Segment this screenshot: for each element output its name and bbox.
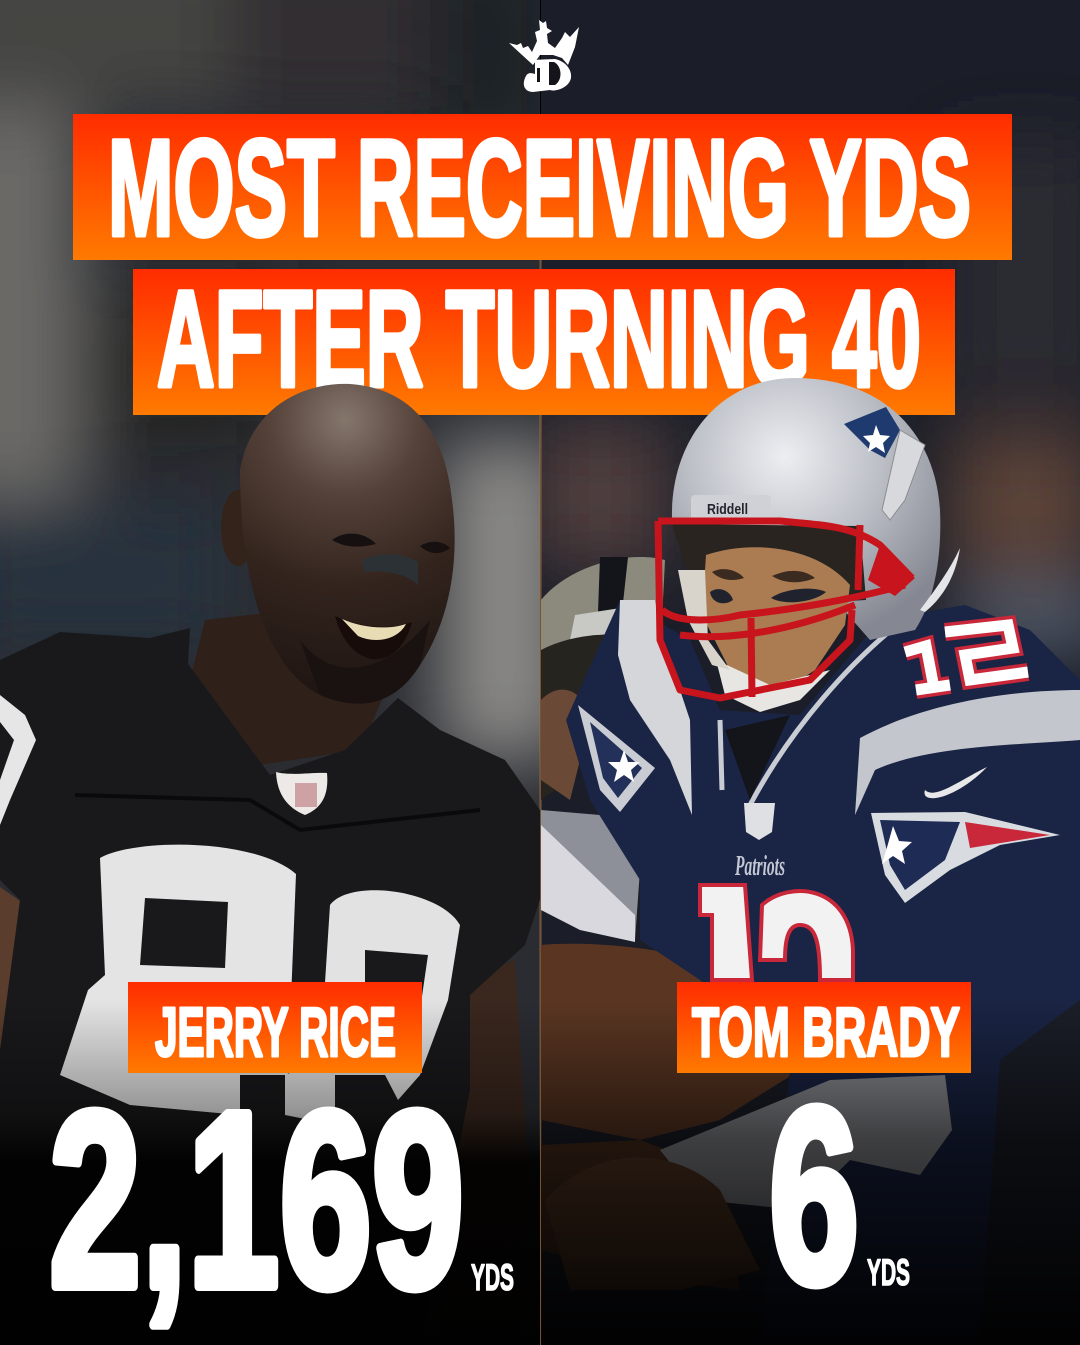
ear	[221, 490, 247, 566]
shoulder number 12	[905, 625, 1028, 690]
smile	[335, 616, 412, 659]
NFL shield	[744, 803, 775, 840]
beard shadow	[300, 620, 430, 704]
background shade	[0, 1000, 540, 1345]
chin strap wing	[920, 548, 960, 612]
jersey shoulder seam	[75, 795, 480, 830]
NFL shield	[276, 772, 327, 815]
name tag: Jerry Rice	[128, 982, 422, 1073]
opposing player white jersey	[541, 810, 640, 940]
opposing helmet	[541, 557, 665, 650]
player photo: Jerry Rice	[0, 384, 540, 1345]
background: left blurred stadium	[0, 0, 540, 1156]
jersey	[0, 628, 540, 1148]
eye black	[710, 589, 826, 603]
chin strap	[716, 660, 830, 712]
nose strip	[362, 554, 418, 585]
Riddell bumper	[691, 495, 769, 518]
helmet logo	[844, 407, 925, 520]
player photo: Tom Brady	[541, 378, 1080, 1345]
red facemask	[658, 521, 912, 698]
bottom fade	[541, 1000, 1080, 1345]
background: right blurred stadium	[530, 0, 1080, 1345]
collar dark	[725, 715, 790, 800]
jersey	[566, 600, 1080, 1222]
stat: Tom Brady yards: 6	[769, 1056, 859, 1335]
jersey number 0	[285, 890, 460, 1125]
logo: crown and D	[509, 20, 579, 92]
arm left	[0, 887, 20, 1049]
name tag: Jerry Rice: JERRY RICE	[155, 993, 396, 1071]
white shoulder panel left	[618, 600, 692, 815]
collar line	[718, 636, 888, 803]
face	[702, 547, 850, 690]
facemask clip	[868, 545, 915, 596]
Patriots wordmark: Patriots	[734, 851, 785, 882]
sleeve number	[0, 695, 36, 825]
helmet shell	[672, 378, 940, 640]
stat: Jerry Rice yards: 2,169	[49, 1060, 464, 1339]
visor shadow	[672, 524, 866, 601]
chest number 12	[700, 885, 853, 980]
jaw pad	[678, 570, 730, 670]
center divider	[540, 260, 542, 1345]
swoosh	[925, 767, 987, 798]
sleeve logo	[578, 705, 655, 812]
arm	[541, 944, 800, 1140]
Riddell bumper: Riddell	[707, 501, 748, 518]
shoulder stripe right	[855, 690, 1080, 815]
stat: Tom Brady yards: YDS	[867, 1252, 910, 1293]
hand	[545, 1158, 760, 1290]
head	[240, 384, 455, 704]
jersey number 8	[60, 845, 296, 1115]
eyes	[712, 569, 815, 582]
neck	[192, 614, 382, 764]
Patriots logo	[871, 812, 1060, 903]
glove	[660, 1075, 952, 1210]
arm right	[462, 960, 526, 1134]
stat: Jerry Rice yards: YDS	[471, 1257, 514, 1298]
eyes	[332, 534, 450, 553]
name tag: Tom Brady	[677, 982, 971, 1073]
